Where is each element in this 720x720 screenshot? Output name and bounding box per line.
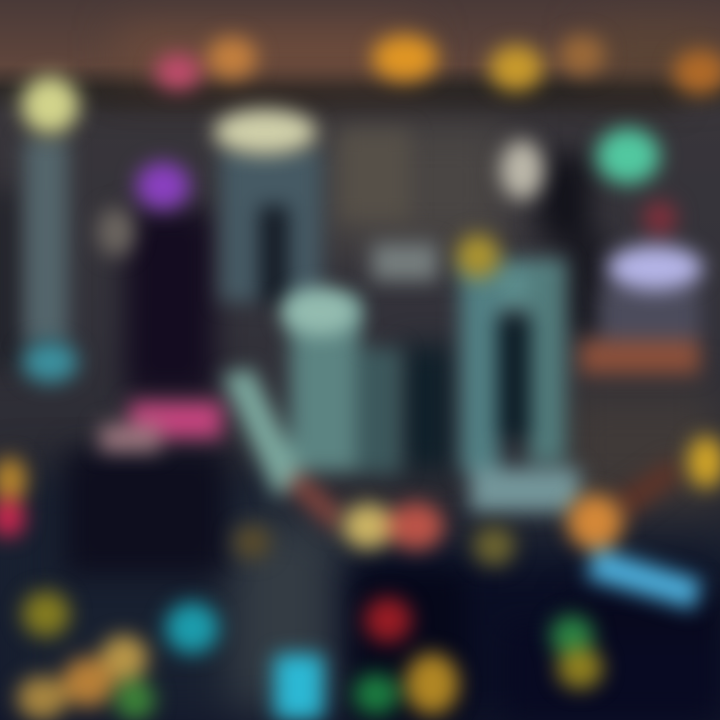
teal and grey towers [24,130,700,532]
